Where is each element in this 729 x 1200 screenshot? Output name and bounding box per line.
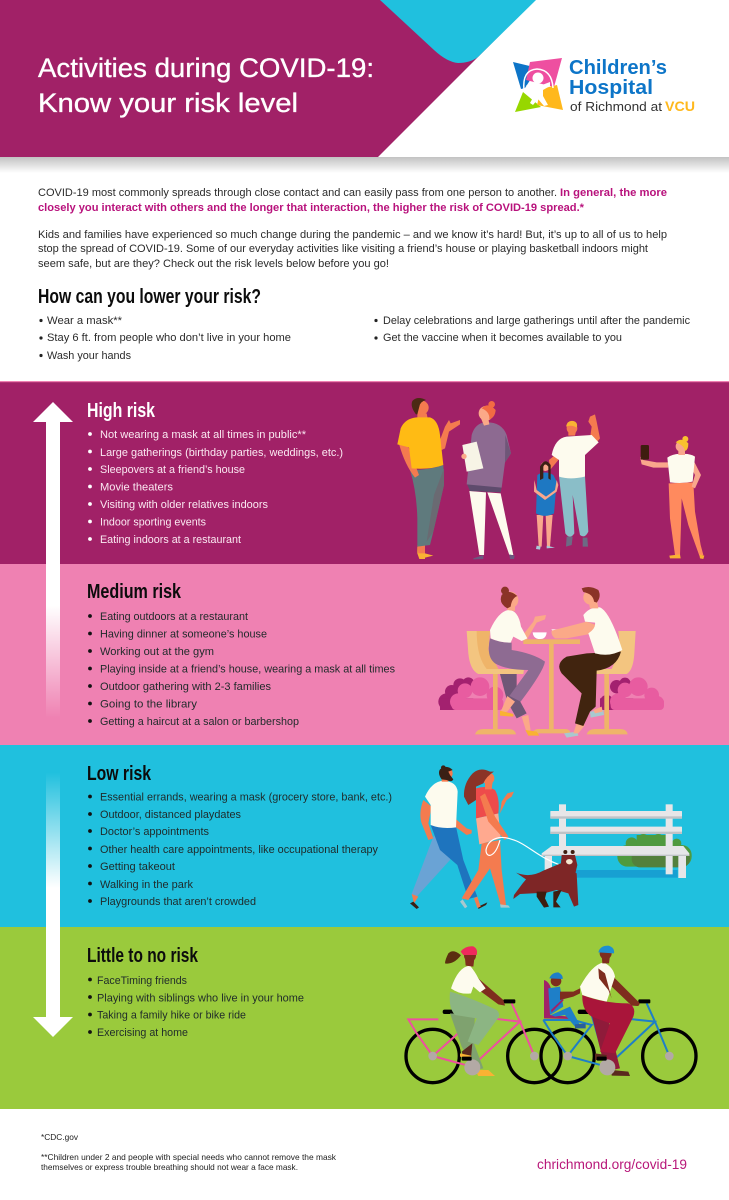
list: high risk activities: Sleepovers at a friend’s house bbox=[100, 464, 245, 476]
leash bbox=[486, 838, 560, 865]
list: little to no risk activities: Taking a family hike or bike ride bbox=[97, 1010, 246, 1022]
intro paragraph 2: Kids and families have experienced so much change during the pandemic – and we know it’s hard! But, it’s up to all of us to help bbox=[38, 229, 667, 241]
panel: little to no risk bbox=[0, 927, 729, 1109]
logo: Children's Hospital of Richmond at VCU: of Richmond at bbox=[570, 99, 662, 114]
heading: how can you lower your risk: How can you lower your risk? bbox=[38, 286, 261, 308]
list: medium risk activities: Playing inside at a friend’s house, wearing a mask at all times bbox=[100, 664, 395, 676]
list: high risk activities: Eating indoors at a restaurant bbox=[100, 534, 241, 546]
list: low risk activities: Getting takeout bbox=[100, 861, 175, 873]
list: high risk activities: Visiting with older relatives indoors bbox=[100, 499, 268, 511]
illustration: two people at a cafe table bbox=[438, 587, 664, 738]
heading: medium risk: Medium risk bbox=[87, 581, 182, 603]
logo: Children's Hospital of Richmond at VCU: Children’s bbox=[569, 57, 667, 79]
title bbox=[38, 53, 374, 118]
list: medium risk activities: Getting a haircut at a salon or barbershop bbox=[100, 716, 299, 728]
list: low risk activities: Walking in the park bbox=[100, 879, 193, 891]
intro paragraph 2: seem safe, but are they? Check out the risk levels below before you go! bbox=[38, 258, 389, 270]
illustration: couple walking a dog past a bench bbox=[410, 765, 692, 909]
list: ways to lower risk: Wear a mask** bbox=[47, 315, 123, 327]
man bbox=[417, 547, 433, 559]
list: ways to lower risk: Wash your hands bbox=[47, 350, 131, 362]
intro paragraph 1 bbox=[38, 187, 667, 214]
logo: Children's Hospital of Richmond at VCU: VCU bbox=[665, 98, 695, 114]
man bbox=[412, 832, 455, 897]
list: medium risk activities: Outdoor gathering with 2-3 families bbox=[100, 681, 271, 693]
footnotes: *CDC.gov bbox=[41, 1132, 79, 1142]
list: ways to lower risk bbox=[39, 315, 690, 362]
list: low risk activities: Essential errands, wearing a mask (grocery store, bank, etc.) bbox=[100, 792, 392, 804]
girl in blue dress bbox=[537, 515, 553, 547]
blue bike frame bbox=[543, 1003, 669, 1067]
illustration: family riding bicycles bbox=[406, 946, 696, 1083]
man with raised hand bbox=[566, 537, 588, 547]
man rider bbox=[592, 1015, 620, 1070]
list: low risk activities: Doctor’s appointments bbox=[100, 826, 209, 838]
title: Know your risk level bbox=[38, 88, 298, 118]
bushes behind bench bbox=[617, 834, 692, 867]
cranks bbox=[464, 1059, 480, 1075]
man bbox=[564, 710, 604, 738]
wheels bbox=[406, 1029, 696, 1083]
list: low risk activities: Playgrounds that aren’t crowded bbox=[100, 896, 256, 908]
intro paragraph 1: In general, the more bbox=[560, 187, 667, 199]
intro paragraph 2 bbox=[38, 229, 667, 270]
list: ways to lower risk: Stay 6 ft. from people who don’t live in your home bbox=[47, 332, 291, 344]
woman bbox=[500, 674, 527, 718]
list: medium risk activities: Working out at the gym bbox=[100, 646, 214, 658]
list: medium risk activities: Having dinner at someone’s house bbox=[100, 628, 267, 640]
dog bbox=[513, 863, 578, 907]
heading: low risk: Low risk bbox=[87, 763, 152, 785]
pink bike frame bbox=[408, 1003, 534, 1067]
woman with phone bbox=[669, 482, 703, 556]
list: little to no risk activities bbox=[88, 975, 304, 1039]
list: medium risk activities: Going to the library bbox=[100, 698, 198, 710]
list: low risk activities: Outdoor, distanced playdates bbox=[100, 809, 241, 821]
arrow: risk decreasing downward bbox=[33, 772, 73, 1037]
list: medium risk activities bbox=[88, 611, 395, 728]
intro paragraph 2: stop the spread of COVID-19. Some of our everyday activities like visiting a friend’s house or playing basketball indoors might bbox=[38, 243, 649, 255]
list: low risk activities bbox=[88, 792, 392, 908]
bench bbox=[542, 804, 689, 878]
logo: Children's Hospital of Richmond at VCU bbox=[513, 57, 695, 114]
panel: low risk bbox=[0, 745, 729, 927]
cups bbox=[533, 632, 547, 639]
woman bbox=[500, 792, 514, 813]
footnotes: **Children under 2 and people with special needs who cannot remove the mask bbox=[41, 1152, 337, 1162]
woman with paper bbox=[469, 491, 513, 555]
child bbox=[551, 1007, 580, 1027]
header cyan accent bbox=[380, 0, 536, 63]
intro paragraph 1: COVID-19 most commonly spreads through close contact and can easily pass from one person to another. bbox=[38, 187, 557, 199]
list: ways to lower risk: Get the vaccine when it becomes available to you bbox=[383, 332, 622, 344]
chairs and table bbox=[467, 631, 636, 734]
list: little to no risk activities: Exercising at home bbox=[97, 1027, 188, 1039]
list: medium risk activities: Eating outdoors at a restaurant bbox=[100, 611, 248, 623]
list: high risk activities: Movie theaters bbox=[100, 482, 173, 494]
list: little to no risk activities: Playing with siblings who live in your home bbox=[97, 992, 304, 1004]
illustration: people standing close together bbox=[397, 398, 704, 559]
woman rider bbox=[450, 1013, 483, 1070]
arrow: risk increasing upward bbox=[33, 402, 73, 718]
intro paragraph 1: closely you interact with others and the longer that interaction, the higher the risk of COVID-19 spread.* bbox=[38, 202, 585, 214]
list: high risk activities: Not wearing a mask at all times in public** bbox=[100, 429, 307, 441]
footnotes bbox=[41, 1132, 337, 1172]
child seat bbox=[544, 980, 572, 1019]
list: high risk activities: Large gatherings (birthday parties, weddings, etc.) bbox=[100, 447, 343, 459]
bench shadow bbox=[575, 870, 678, 878]
footnotes: themselves or express trouble breathing should not wear a face mask. bbox=[41, 1162, 298, 1172]
saddles and bars bbox=[443, 1010, 456, 1014]
list: little to no risk activities: FaceTiming friends bbox=[97, 975, 187, 987]
header banner bbox=[0, 0, 729, 173]
bushes bbox=[438, 677, 633, 710]
panel: high risk bbox=[0, 381, 729, 564]
title: Activities during COVID-19: bbox=[38, 53, 374, 83]
list: ways to lower risk: Delay celebrations and large gatherings until after the pandemic bbox=[383, 315, 690, 327]
list: low risk activities: Other health care appointments, like occupational therapy bbox=[100, 844, 378, 856]
website url: chrichmond.org/covid-19 bbox=[537, 1156, 687, 1172]
list: high risk activities bbox=[88, 429, 343, 546]
heading: little to no risk: Little to no risk bbox=[87, 945, 199, 967]
list: high risk activities: Indoor sporting events bbox=[100, 516, 206, 528]
heading: high risk: High risk bbox=[87, 400, 156, 422]
panel: medium risk bbox=[0, 564, 729, 745]
logo: Children's Hospital of Richmond at VCU: Hospital bbox=[569, 77, 653, 99]
